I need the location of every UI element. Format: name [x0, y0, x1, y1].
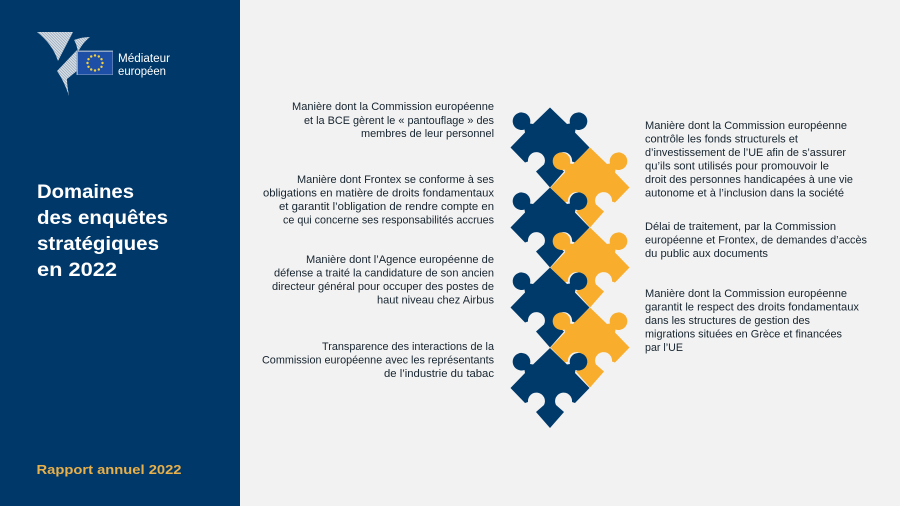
title: des enquêtes	[37, 207, 168, 229]
text: Agence européenne de défense: Manière dont l’Agence européenne de	[306, 254, 494, 266]
text: pantouflage: membres de leur personnel	[361, 128, 494, 140]
text: migrations Grèce	[645, 288, 859, 354]
logo wordmark: Médiateur	[118, 53, 170, 65]
title: stratégiques	[37, 233, 159, 255]
text: Frontex: et garantit l’obligation de rendre compte en	[279, 201, 494, 213]
text: Frontex: Manière dont Frontex se conforme à ses	[297, 174, 494, 186]
puzzle piece: orange 1	[550, 148, 630, 228]
text: accès aux documents: européenne et Frontex, de demandes d’accès	[645, 234, 867, 246]
text: fonds structurels: Manière dont la Commission européenne	[645, 120, 847, 132]
puzzle piece: navy 3	[510, 268, 590, 348]
text: tabac: de l’industrie du tabac	[384, 368, 494, 380]
text: Agence européenne de défense: directeur général pour occuper des postes de	[272, 281, 494, 293]
text: accès aux documents: du public aux documents	[645, 248, 768, 260]
footer: annual report label: Rapport annuel 2022	[36, 462, 182, 477]
text: tabac: Transparence des interactions de la	[322, 341, 495, 353]
text: Agence européenne de défense: défense a traité la candidature de son ancien	[274, 268, 494, 280]
puzzle piece: orange 2	[550, 228, 630, 308]
text: Frontex	[263, 174, 494, 226]
text: fonds structurels	[645, 120, 853, 200]
title: en 2022	[37, 259, 117, 281]
text: migrations Grèce: migrations situées en Grèce et financées	[645, 328, 842, 340]
text: pantouflage	[292, 101, 494, 140]
title	[37, 181, 168, 281]
puzzle column	[510, 108, 630, 428]
text: fonds structurels: contrôle les fonds structurels et	[645, 134, 799, 146]
icon: EU flag	[76, 50, 113, 75]
text: migrations Grèce: dans les structures de gestion des	[645, 315, 810, 327]
text: accès aux documents	[645, 221, 867, 260]
text: migrations Grèce: Manière dont la Commission européenne	[645, 288, 847, 300]
puzzle piece: orange 3	[550, 308, 630, 388]
text block: left column	[262, 101, 495, 380]
puzzle piece: navy 4	[510, 348, 590, 428]
text: pantouflage: et la BCE gèrent le « pantouflage » des	[304, 115, 494, 127]
text: migrations Grèce: garantit le respect des droits fondamentaux	[645, 302, 859, 314]
icon: logo swoosh	[37, 32, 90, 96]
text: Agence européenne de défense: haut niveau chez Airbus	[377, 294, 494, 306]
text: Agence européenne de défense	[272, 254, 494, 306]
text: pantouflage: Manière dont la Commission européenne	[292, 101, 494, 113]
text: tabac: Commission européenne avec les représentants	[262, 354, 494, 366]
text: fonds structurels: d’investissement de l’UE afin de s’assurer	[645, 147, 846, 159]
text: fonds structurels: autonome et à l’inclusion dans la société	[645, 188, 844, 200]
logo: European Ombudsman	[37, 32, 170, 96]
text: fonds structurels: droit des personnes handicapées à une vie	[645, 174, 853, 186]
logo wordmark	[118, 53, 170, 78]
panel: left navy sidebar	[0, 0, 240, 506]
text block: right column	[645, 120, 867, 354]
text: Frontex: obligations en matière de droits fondamentaux	[263, 188, 494, 200]
text: fonds structurels: qu’ils sont utilisés pour promouvoir le	[645, 160, 829, 172]
title: Domaines	[37, 181, 134, 203]
text: Frontex: ce qui concerne ses responsabilités accrues	[283, 214, 494, 226]
puzzle piece: navy 2	[510, 188, 590, 268]
text: migrations Grèce: par l’UE	[645, 342, 683, 354]
text: accès aux documents: Délai de traitement, par la Commission	[645, 221, 836, 233]
text: tabac	[262, 341, 495, 380]
logo wordmark: européen	[118, 66, 166, 78]
puzzle piece: navy 1	[510, 108, 590, 188]
